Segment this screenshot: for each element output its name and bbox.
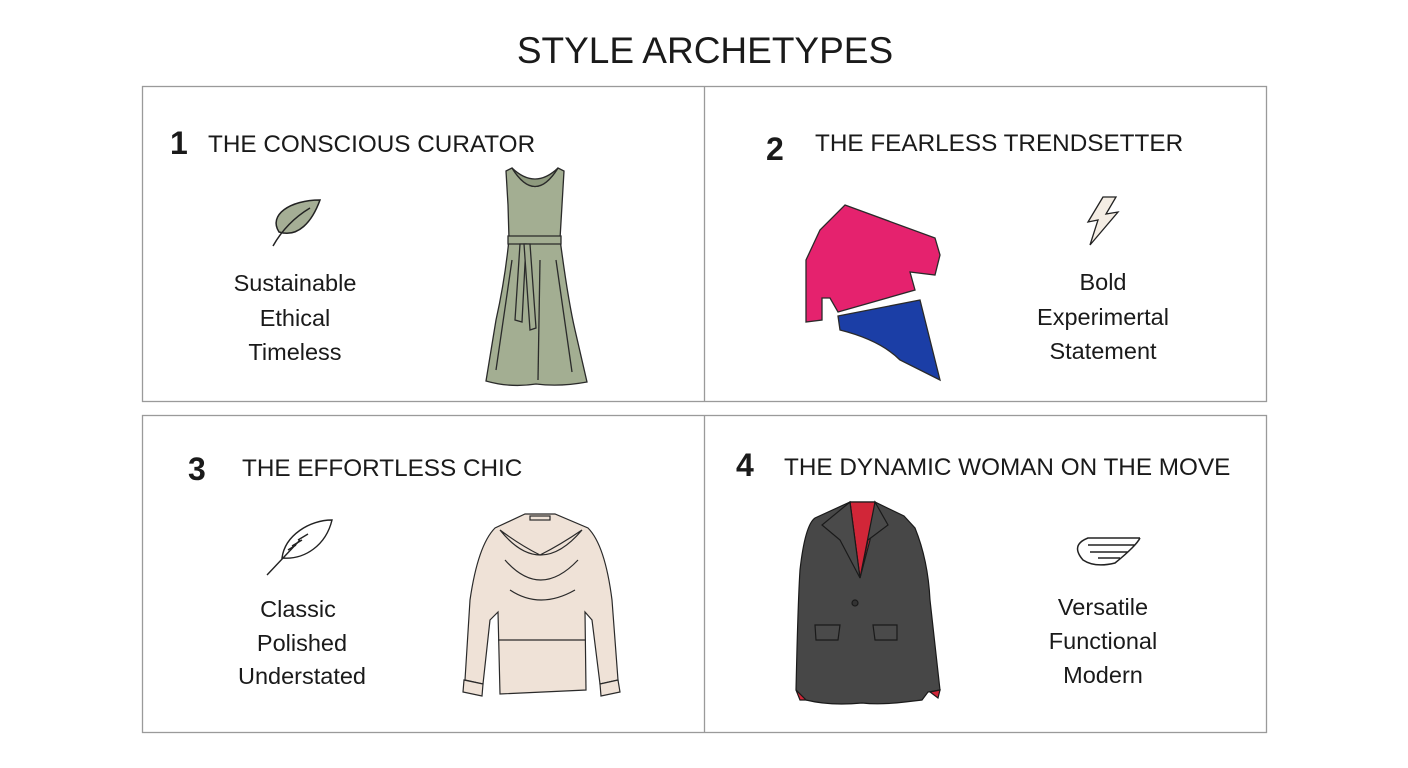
keywords 4 [1049,594,1157,688]
keywords 1: Ethical [260,305,330,331]
icon: leaf [273,200,320,246]
title: STYLE ARCHETYPES [517,30,893,71]
keywords 2 [1037,269,1169,364]
panel 2: fearless trendsetter [766,130,1183,380]
keywords 1 [234,270,356,365]
panel 1: conscious curator [170,125,587,385]
heading 3 [188,451,522,487]
heading 3: THE EFFORTLESS CHIC [242,455,522,482]
top garment [806,205,940,380]
heading 3: 3 [188,451,206,487]
heading 2: 2 [766,131,784,167]
heading 2 [766,130,1183,167]
panel 4: dynamic woman on the move [736,447,1230,704]
dress [486,168,587,385]
icon: feather [267,520,332,575]
keywords 3: Classic [260,596,336,622]
keywords 3: Understated [238,663,366,689]
panel: top row [142,86,1266,402]
heading 1: THE CONSCIOUS CURATOR [208,131,535,158]
jacket [796,502,940,704]
keywords 4: Modern [1063,662,1143,688]
keywords 2: Statement [1049,338,1157,364]
heading 4: 4 [736,447,754,483]
panel: bottom row [142,415,1266,732]
keywords 4: Functional [1049,628,1157,654]
icon: lightning [1088,197,1118,245]
heading 1: 1 [170,125,188,161]
keywords 4: Versatile [1058,594,1148,620]
heading 1 [170,125,535,161]
heading 4: THE DYNAMIC WOMAN ON THE MOVE [784,454,1230,481]
blouse [463,514,620,696]
keywords 3 [238,596,366,689]
heading 4 [736,447,1230,483]
icon: wing [1078,538,1140,565]
keywords 1: Timeless [248,339,342,365]
keywords 2: Bold [1079,269,1127,295]
keywords 1: Sustainable [234,270,356,296]
panel 3: effortless chic [188,451,620,696]
heading 2: THE FEARLESS TRENDSETTER [815,130,1183,157]
keywords 2: Experimertal [1037,304,1169,330]
keywords 3: Polished [257,630,347,656]
